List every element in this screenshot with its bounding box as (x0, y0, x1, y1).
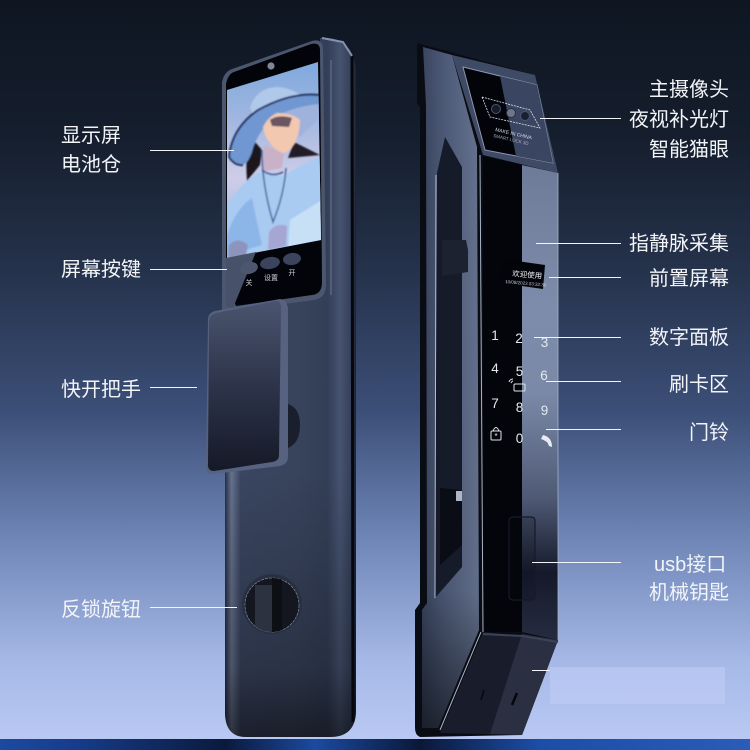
front lock: door-side panel: 开 (288, 269, 296, 277)
side edge highlights (352, 55, 353, 722)
handle pivot (288, 404, 300, 448)
label: usb接口 机械钥匙 (649, 553, 729, 604)
label: 反锁旋钮: 反锁旋钮 (61, 598, 141, 621)
label: 主摄像头 夜视补光灯 智能猫眼: 夜视补光灯 (629, 108, 729, 131)
label: 指静脉采集: 指静脉采集 (629, 232, 729, 255)
keypad: 5 (516, 364, 523, 379)
front mini screen (501, 259, 547, 289)
camera lenses: SMART LOCK 3D (493, 133, 530, 146)
keypad: 8 (516, 400, 523, 415)
bottom strip (0, 739, 750, 750)
recess (435, 137, 462, 598)
screen key glare (226, 252, 256, 308)
hair (246, 135, 262, 181)
label: 主摄像头 夜视补光灯 智能猫眼: 主摄像头 (649, 78, 729, 101)
keypad: 3 (541, 335, 548, 350)
leader line: 门铃 (546, 428, 621, 430)
label: 快开把手: 快开把手 (61, 378, 141, 401)
camera lenses (482, 97, 540, 146)
icon: lock star: * (494, 432, 498, 441)
leader line: 显示屏 (150, 150, 234, 152)
leader line: 快开把手 (150, 386, 197, 388)
usb and key cover (509, 517, 535, 600)
leader line: 前置屏幕 (549, 276, 621, 278)
lock outline (415, 43, 558, 737)
leader line: usb接口 (532, 562, 621, 564)
keypad: 6 (540, 368, 548, 383)
keypad: 0 (516, 431, 523, 446)
icon: doorbell (541, 435, 552, 447)
top camera cap (452, 55, 558, 173)
hat underside (288, 104, 319, 136)
pale patch (550, 667, 725, 704)
face (263, 113, 300, 153)
front mini screen: 欢迎使用 (512, 268, 543, 281)
leader line: 数字面板 (534, 336, 621, 338)
screen keys (239, 260, 259, 276)
label: 屏幕按键: 屏幕按键 (61, 258, 141, 281)
keypad: 1 (491, 328, 499, 343)
camera glass (463, 67, 553, 163)
label: 显示屏 电池仓 (61, 125, 121, 176)
label: usb接口 机械钥匙: usb接口 (654, 553, 726, 576)
leader line: 指静脉采集 (536, 242, 621, 244)
keypad: 9 (541, 403, 548, 418)
screen bezel (222, 40, 326, 311)
front lock: door-side panel (206, 38, 356, 737)
front mini screen: 10/08/2023 03:32:30 (505, 279, 547, 288)
quick-open handle (206, 299, 288, 474)
hat crown (250, 86, 300, 114)
label: 门铃: 门铃 (689, 421, 729, 444)
necklace (262, 150, 286, 222)
keypad: 4 (491, 361, 499, 376)
front face (483, 156, 522, 632)
shirt (227, 156, 322, 260)
lock body (225, 38, 356, 737)
neck (262, 145, 284, 172)
label: 刷卡区: 刷卡区 (669, 373, 729, 396)
leader line: 刷卡区 (546, 380, 621, 382)
label: 显示屏 电池仓: 电池仓 (61, 153, 121, 176)
camera lenses: MAKE IN CHINA (495, 127, 533, 142)
leader line: 反锁旋钮 (150, 606, 237, 608)
leader line: 摄像头 (540, 118, 621, 120)
label: 主摄像头 夜视补光灯 智能猫眼: 智能猫眼 (649, 138, 729, 161)
leader line: stub (532, 670, 550, 672)
label: 前置屏幕: 前置屏幕 (649, 267, 729, 290)
front lock: door-side panel: 关 (246, 278, 252, 287)
lock knob (242, 574, 302, 634)
hands (268, 225, 287, 250)
camera (267, 62, 275, 70)
label: 显示屏 电池仓: 显示屏 (61, 125, 121, 147)
leader line: 屏幕按键 (150, 268, 227, 270)
screen photo (227, 62, 321, 258)
keypad: 2 (515, 331, 523, 346)
keypad: 7 (491, 396, 499, 411)
hat brim (229, 95, 319, 165)
label: usb接口 机械钥匙: 机械钥匙 (649, 581, 729, 604)
side panel (422, 47, 479, 728)
front lock: door-side panel: 设置 (264, 273, 278, 282)
label: 主摄像头 夜视补光灯 智能猫眼 (629, 78, 729, 161)
chin (440, 632, 558, 735)
icon: card reader (509, 379, 525, 391)
keypad (491, 328, 552, 447)
label: 数字面板: 数字面板 (649, 326, 729, 349)
back lock: outdoor panel (415, 43, 558, 737)
